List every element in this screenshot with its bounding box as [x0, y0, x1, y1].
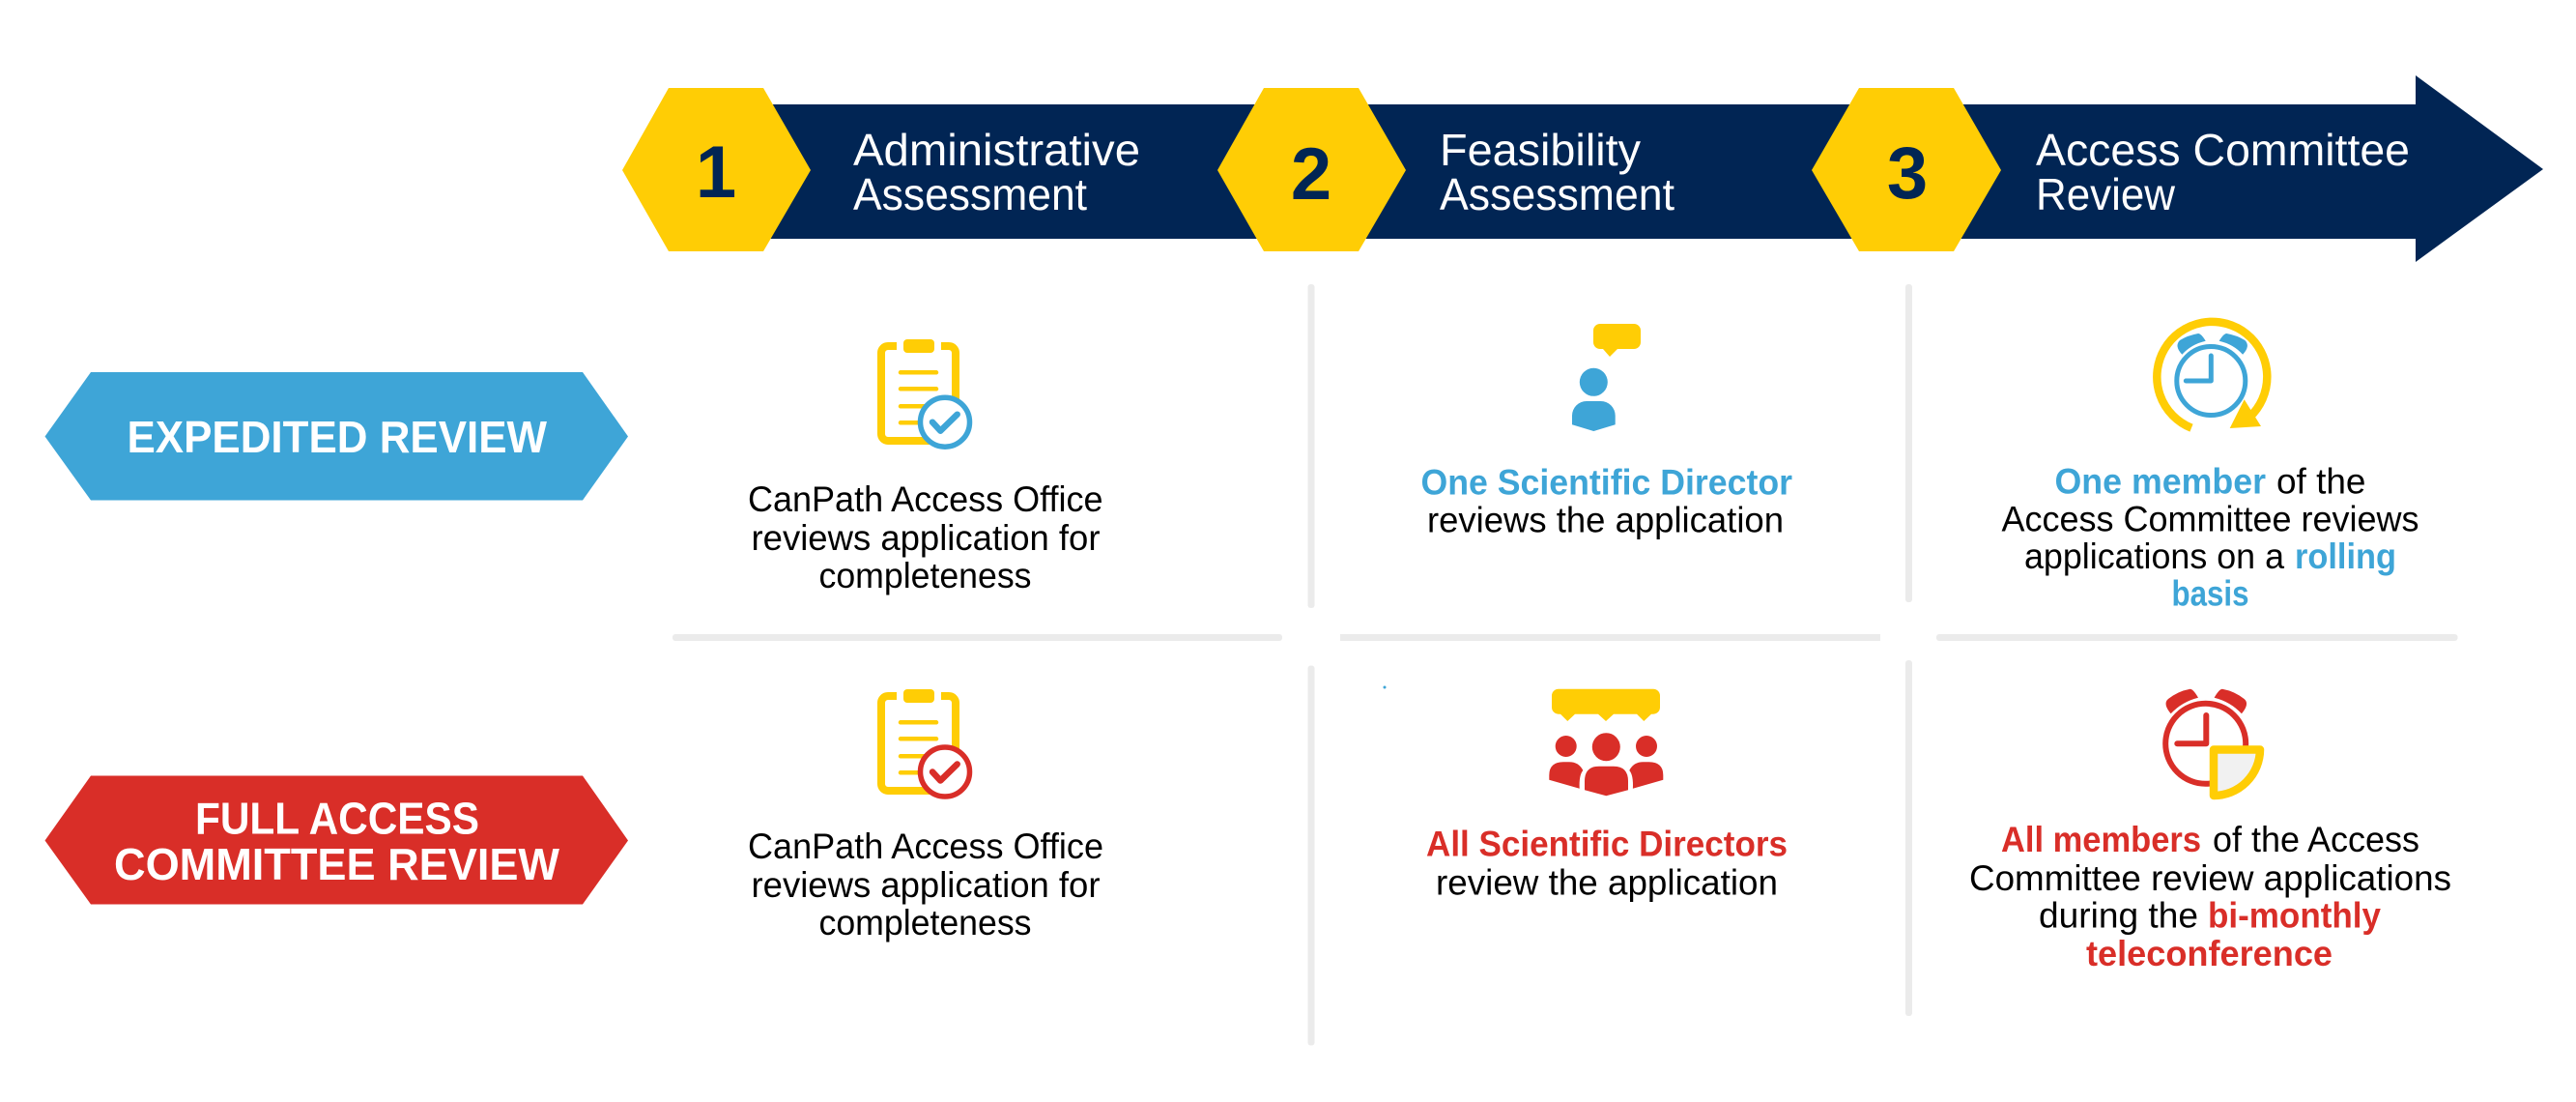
- icon: group with speech bubble: [1549, 689, 1663, 796]
- step 3 hexagon: 3: [1887, 132, 1928, 215]
- cell: expedited feasibility assessment: [1420, 324, 1792, 539]
- full access committee review badge: FULL ACCESS: [195, 793, 479, 843]
- step 3 hexagon: [1812, 88, 2001, 251]
- text: all members bi-monthly teleconference: All members: [2001, 820, 2201, 859]
- icon: clipboard with blue check: [881, 338, 970, 447]
- expedited review badge: [44, 372, 628, 501]
- step 1 hexagon: 1: [696, 131, 736, 214]
- text: all members bi-monthly teleconference: Committee review applications: [1969, 858, 2451, 898]
- text: all scientific directors: [1426, 825, 1788, 903]
- icon: alarm clock with calendar page: [2165, 689, 2260, 796]
- text: completeness review: reviews application for: [752, 865, 1100, 905]
- text: all members bi-monthly teleconference: of the Access: [2213, 820, 2419, 859]
- text: one member rolling basis: [2002, 462, 2419, 614]
- text: completeness review: completeness: [819, 903, 1032, 942]
- text: one scientific director: One Scientific Director: [1420, 462, 1792, 503]
- text: completeness review: CanPath Access Office: [748, 479, 1103, 519]
- full access committee review badge: COMMITTEE REVIEW: [114, 839, 560, 889]
- text: all scientific directors: review the application: [1436, 862, 1778, 903]
- text: all members bi-monthly teleconference: bi-monthly: [2208, 895, 2381, 936]
- expedited review badge: EXPEDITED REVIEW: [128, 412, 548, 462]
- text: one member rolling basis: of the: [2276, 462, 2365, 502]
- text: completeness review: [748, 479, 1103, 595]
- decorative dot: [1384, 686, 1386, 688]
- cell: full administrative assessment: [748, 688, 1103, 942]
- text: one member rolling basis: rolling: [2295, 536, 2396, 576]
- text: all members bi-monthly teleconference: teleconference: [2086, 934, 2333, 973]
- text: all members bi-monthly teleconference: during the: [2039, 895, 2198, 936]
- text: completeness review: completeness: [819, 556, 1032, 595]
- step 2 title: Assessment: [1440, 169, 1674, 219]
- text: one scientific director: reviews the application: [1427, 501, 1784, 539]
- step 3 title: [2036, 125, 2410, 219]
- text: one scientific director: [1420, 462, 1792, 539]
- text: all members bi-monthly teleconference: [1969, 820, 2451, 973]
- step 2 title: Feasibility: [1440, 125, 1641, 175]
- step 3 title: Access Committee: [2036, 125, 2410, 175]
- icon: alarm clock with circular arrow: [2157, 322, 2267, 428]
- text: all scientific directors: All Scientific Directors: [1426, 825, 1788, 864]
- text: completeness review: reviews application for: [752, 518, 1100, 558]
- step 2 hexagon: 2: [1291, 133, 1331, 216]
- full access committee review badge: [44, 775, 628, 905]
- cell: full access committee review: [1969, 689, 2451, 973]
- text: one member rolling basis: One member: [2054, 462, 2266, 502]
- text: one member rolling basis: applications on a: [2024, 536, 2284, 576]
- cell: expedited access committee review: [2002, 322, 2419, 614]
- text: completeness review: [748, 826, 1103, 942]
- step 2 title: [1440, 125, 1674, 219]
- text: completeness review: CanPath Access Office: [748, 826, 1103, 866]
- navy arrow: [696, 75, 2543, 262]
- process arrow header: [622, 75, 2543, 262]
- cell: full feasibility assessment: [1426, 689, 1788, 903]
- step 2 hexagon: [1217, 88, 1406, 251]
- text: one member rolling basis: basis: [2172, 574, 2249, 614]
- step 1 title: Administrative: [853, 125, 1140, 175]
- text: one member rolling basis: Access Committee reviews: [2002, 499, 2419, 539]
- step 3 title: Review: [2036, 169, 2176, 219]
- cell: expedited administrative assessment: [748, 338, 1103, 595]
- step 1 hexagon: [622, 88, 811, 251]
- step 1 title: [853, 125, 1140, 219]
- icon: person with speech bubble: [1572, 324, 1641, 431]
- icon: clipboard with red check: [881, 688, 970, 797]
- step 1 title: Assessment: [853, 169, 1087, 219]
